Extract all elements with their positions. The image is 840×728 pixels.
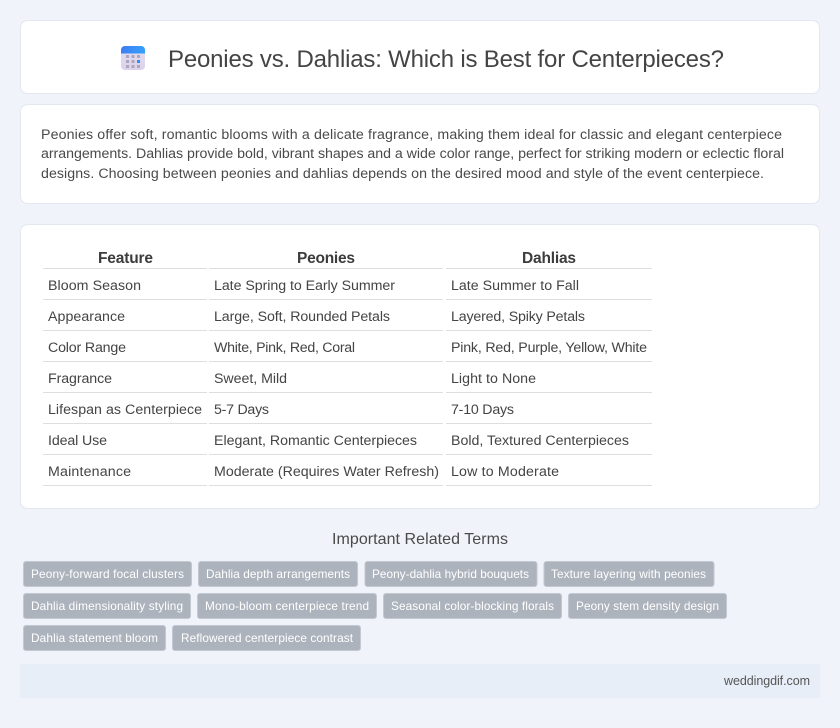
row: ideal use: Elegant, Romantic Centerpieces (214, 433, 417, 449)
row: lifespan: 7-10 Days (451, 402, 514, 418)
row: lifespan: 5-7 Days (214, 402, 269, 418)
row: appearance: Large, Soft, Rounded Petals (214, 309, 390, 325)
tags: related terms: Seasonal color-blocking florals (391, 599, 554, 613)
row: ideal use (48, 433, 629, 449)
intro text: Peonies offer soft, romantic blooms with a delicate fragrance, making them ideal for classic and elegant centerpiece (41, 127, 782, 143)
tags: related terms: Mono-bloom centerpiece trend (205, 599, 369, 613)
tags: related terms: Peony stem density design (576, 599, 719, 613)
icon: calendar (121, 46, 145, 70)
tags: related terms (24, 562, 726, 650)
row: appearance: Appearance (48, 309, 125, 325)
row: color range: Pink, Red, Purple, Yellow, White (451, 340, 647, 356)
footer: weddingdif.com (723, 674, 810, 688)
tags: related terms: Reflowered centerpiece contrast (181, 631, 354, 645)
panel: title card (20, 20, 820, 94)
row: color range: Color Range (48, 340, 126, 356)
row: maintenance: Moderate (Requires Water Refresh) (214, 464, 439, 480)
panel: comparison table (20, 224, 820, 508)
tags: related terms: Dahlia depth arrangements (206, 567, 350, 581)
row: bloom season: Late Summer to Fall (451, 278, 579, 294)
row: color range (48, 340, 647, 356)
table header: Feature (98, 250, 153, 267)
row: color range: White, Pink, Red, Coral (214, 340, 355, 356)
row: fragrance: Light to None (451, 371, 536, 387)
row: bloom season: Late Spring to Early Summer (214, 278, 395, 294)
row: ideal use: Ideal Use (48, 433, 107, 449)
row: bloom season (48, 278, 579, 294)
tags: related terms: Peony-forward focal clusters (31, 567, 184, 581)
row: lifespan (48, 402, 514, 418)
tags: related terms: Peony-dahlia hybrid bouquets (372, 567, 529, 581)
table header: Dahlias (522, 250, 576, 267)
footer (20, 664, 820, 698)
intro text: arrangements. Dahlias provide bold, vibrant shapes and a wide color range, perfect for striking modern or eclectic floral (41, 146, 784, 162)
row: fragrance: Sweet, Mild (214, 371, 287, 387)
table header: Peonies (297, 250, 355, 267)
tags: related terms: Dahlia dimensionality styling (31, 599, 183, 613)
row: lifespan: Lifespan as Centerpiece (48, 402, 202, 418)
row: maintenance: Low to Moderate (451, 464, 559, 480)
row: appearance: Layered, Spiky Petals (451, 309, 585, 325)
heading: related terms: Important Related Terms (332, 531, 508, 548)
tags: related terms: Dahlia statement bloom (31, 631, 158, 645)
row: maintenance: Maintenance (48, 464, 131, 480)
panel: introduction (20, 104, 820, 204)
title: Peonies vs. Dahlias: Which is Best for Centerpieces? (168, 46, 724, 73)
tags: related terms: Texture layering with peonies (551, 567, 706, 581)
intro text (41, 127, 784, 182)
table header (98, 250, 576, 267)
row: maintenance (48, 464, 559, 480)
row: fragrance (48, 371, 536, 387)
row: bloom season: Bloom Season (48, 278, 141, 294)
row: fragrance: Fragrance (48, 371, 112, 387)
row: appearance (48, 309, 585, 325)
row: ideal use: Bold, Textured Centerpieces (451, 433, 629, 449)
intro text: designs. Choosing between peonies and dahlias depends on the desired mood and style of the event centerpiece. (41, 166, 764, 182)
